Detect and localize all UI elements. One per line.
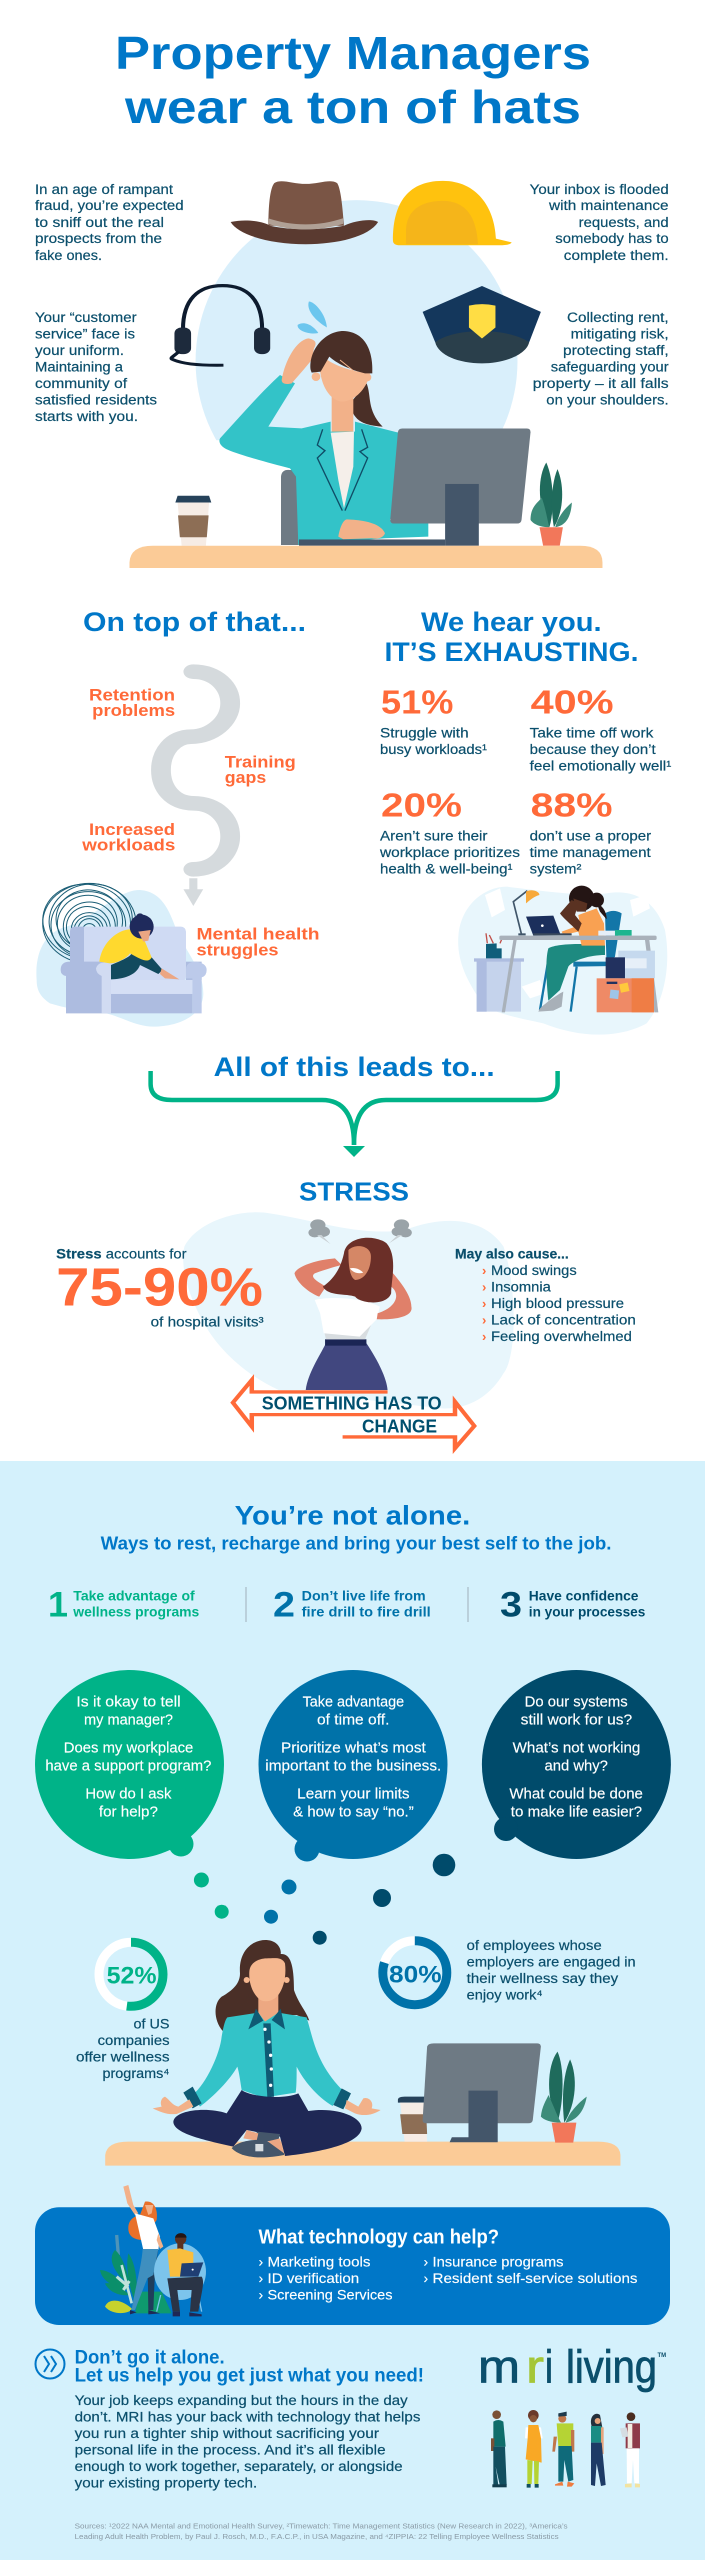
step 1: Take advantage of [73,1589,195,1604]
stat: 51 percent: 51% [381,683,453,720]
panel: what technology can help: › [258,2270,264,2286]
illustration: overworked woman at desk [458,886,667,1035]
monitor [299,428,531,546]
double arrow banner: CHANGE [362,1416,437,1436]
stat: 75-90 percent of hospital visits: of hospital visits³ [151,1315,264,1330]
icon: potted plant [531,462,572,546]
heading: you're not alone [101,1500,611,1553]
text: closing paragraph: Your job keeps expanding but the hours in the day [75,2393,408,2408]
sources [75,2522,568,2541]
figure: man in lime shirt [552,2412,574,2487]
double arrow banner [233,1380,474,1448]
stat: 75-90 percent of hospital visits: 75-90% [56,1258,263,1318]
logo: mri living: i [545,2341,553,2393]
heading: all of this leads to: All of this leads to... [214,1052,495,1082]
step 2: fire drill to fire drill [302,1604,431,1619]
text: customer service note: Maintaining a [35,360,124,374]
heading: stress: STRESS [299,1177,409,1207]
text: fraud hat note: In an age of rampant [35,182,173,197]
text: customer service note: service” face is [35,326,135,342]
logo: mri living: living [566,2341,657,2393]
list: may also cause: › [482,1296,486,1311]
illustration: stressed woman [183,1212,514,1408]
text: security note: safeguarding your [551,360,669,374]
icon: headset [171,286,270,365]
stat: 20 percent: workplace prioritizes [379,845,520,860]
panel: you're not alone background [0,1461,705,2560]
icon: yellow hard hat [393,181,512,245]
text: 80 percent caption: enjoy work⁴ [467,1988,543,2003]
text: 80 percent caption: employers are engaged in [467,1954,636,1969]
heading: we hear you: We hear you. [421,607,602,637]
heading: don't go it alone [75,2346,424,2387]
icon: double chevron circle [36,2350,64,2378]
panel: what technology can help: What technology can help? [258,2226,499,2248]
figure: man in green [491,2410,507,2487]
title: wear a ton of hats [124,81,581,133]
label: increased workloads [81,820,175,854]
bubble: dark teal questions: to make life easier? [511,1805,642,1821]
list: may also cause [455,1246,636,1344]
stat: 40 percent: Take time off work [530,725,654,740]
stat: 51 percent [380,683,488,757]
step 2 [273,1586,431,1625]
bubble: blue advice: & how to say “no.” [293,1805,414,1821]
monitor, cup, plant and desk [129,428,602,568]
label: mental health struggles: struggles [196,940,278,959]
text: maintenance note: with maintenance [548,198,669,213]
step 2: Don’t live life from [302,1589,426,1604]
stat: 75-90 percent of hospital visits: Stress accounts for [56,1246,187,1261]
stat: 88 percent: 88% [531,787,613,824]
bubble: dark teal questions: and why? [544,1759,608,1775]
list: may also cause: › [482,1263,486,1278]
label: retention problems: Retention [89,686,175,705]
title: Property Managers [115,27,591,79]
panel: what technology can help: › [424,2253,428,2269]
panel: what technology can help [35,2185,670,2325]
label: mental health struggles: Mental health [196,925,320,944]
text: security note: protecting staff, [563,343,669,358]
step 3: in your processes [529,1604,645,1619]
step 1: wellness programs [72,1604,199,1619]
heading: you're not alone: You’re not alone. [235,1500,470,1530]
stat: 88 percent: time management [530,845,651,860]
stat: 20 percent: 20% [381,787,462,824]
bubble: green questions: Does my workplace [64,1741,193,1757]
step 3 [500,1586,645,1625]
heading: we hear you: IT’S EXHAUSTING. [384,637,638,667]
step 2: 2 [273,1586,295,1625]
text: closing paragraph: your existing property tech. [75,2476,257,2491]
bubble: green questions: my manager? [84,1713,173,1729]
panel: what technology can help: › [258,2286,264,2302]
logo: mri living: m [478,2341,520,2393]
text: security note [533,310,669,408]
stat: 20 percent [379,787,520,876]
stat: 40 percent: because they don’t [530,742,656,757]
stat: 40 percent [530,683,672,773]
text: 52 percent caption [76,2016,170,2081]
panel: what technology can help: › [258,2253,264,2269]
step 3: 3 [500,1586,522,1625]
panel: what technology can help: Resident self-service solutions [432,2270,638,2286]
text: security note: mitigating risk, [571,326,669,342]
stat: 88 percent: don’t use a proper [530,828,652,843]
label: training gaps [225,752,296,787]
stat: 20 percent: Aren’t sure their [380,828,488,843]
bubble: blue advice: Prioritize what’s most [281,1741,426,1757]
bubble: green questions: Is it okay to tell [76,1695,181,1711]
bubble: green questions: have a support program? [45,1759,211,1775]
stat: 75-90 percent of hospital visits [56,1246,264,1330]
text: fraud hat note: fraud, you’re expected [35,198,184,213]
bubble: blue advice: Learn your limits [297,1787,410,1803]
text: 52 percent caption: offer wellness [76,2049,170,2064]
panel: what technology can help: › [424,2270,428,2286]
step 1 [48,1586,199,1625]
donut: 80 percent: 80% [389,1961,442,1988]
hero illustration: hats and backdrop [170,180,541,440]
text: customer service note: your uniform. [35,343,124,358]
panel: what technology can help: Screening Services [268,2286,392,2302]
label: mental health struggles [196,925,320,959]
figure: meditating woman [153,1940,381,2157]
text: maintenance note: requests, and [579,215,669,230]
desk [129,546,602,568]
list: may also cause: High blood pressure [491,1296,624,1311]
illustration: person on couch [36,879,207,1027]
icon: brown fedora [231,181,378,244]
panel: what technology can help: Insurance programs [432,2253,564,2269]
list: may also cause: Feeling overwhelmed [491,1329,632,1344]
stat: 51 percent: Struggle with [380,725,469,740]
text: maintenance note: complete them. [564,248,669,263]
text: customer service note: starts with you. [35,409,138,424]
bubble: blue advice: Take advantage [303,1695,404,1711]
heading: we hear you [384,607,638,667]
list: may also cause: › [482,1279,486,1294]
text: maintenance note: somebody has to [555,231,669,246]
bubble: green questions: How do I ask [85,1787,172,1803]
bubble: dark teal questions: still work for us? [521,1713,632,1729]
bubble: dark teal questions: Do our systems [525,1695,628,1711]
step 3: Have confidence [529,1589,639,1604]
list: may also cause: › [482,1312,486,1327]
text: closing paragraph: you run a tighter ship without sacrificing your [75,2426,380,2441]
text: 52 percent caption: of US [134,2016,170,2031]
label: increased workloads: Increased [89,820,175,839]
text: customer service note [35,310,157,424]
text: security note: property – it all falls [533,376,669,391]
text: fraud hat note: fake ones. [35,248,102,263]
figure: woman in apron [525,2410,543,2488]
stat: 51 percent: busy workloads¹ [380,742,488,757]
panel: what technology can help: ID verification [268,2270,359,2286]
text: fraud hat note: prospects from the [35,231,162,246]
text: closing paragraph [75,2393,421,2491]
logo: mri living: TM [658,2353,666,2359]
list: may also cause: Insomnia [491,1279,551,1294]
heading: you're not alone: Ways to rest, recharge and bring your best self to the job. [101,1533,611,1553]
bubble: dark teal questions [313,1670,671,1945]
heading: on top of that: On top of that... [83,607,306,637]
bubble: green questions [35,1670,229,1919]
text: maintenance note: Your inbox is flooded [530,182,669,197]
icon: police cap [423,286,541,363]
bubble: blue advice: important to the business. [265,1759,441,1775]
heading: don't go it alone: Don’t go it alone. [75,2346,225,2368]
text: fraud hat note: to sniff out the real [35,215,164,230]
text: security note: on your shoulders. [546,392,669,408]
donut: 52 percent: 52% [107,1962,157,1989]
squiggle arrow [161,672,230,906]
list: may also cause: Lack of concentration [491,1312,636,1327]
logo: mri living [478,2341,666,2393]
sources: Leading Adult Health Problem, by Paul J. Rosch, M.D., F.A.C.P., in USA Magazine, and ⁴ZIPPIA: 22 Telling Employee Wellness Statistics [75,2532,559,2541]
text: maintenance note [530,182,669,263]
label: increased workloads: workloads [81,835,175,854]
text: 80 percent caption: of employees whose [467,1938,602,1953]
stat: 40 percent: feel emotionally well¹ [530,758,672,773]
text: customer service note: satisfied residents [35,392,157,408]
label: training gaps: Training [225,752,296,771]
step 1: 1 [48,1586,68,1625]
icon: coffee cup [175,496,211,546]
desk with cup, monitor and plant [105,2043,620,2166]
text: customer service note: community of [35,376,127,391]
donut: 80 percent [383,1941,447,2005]
text: customer service note: Your “customer [35,310,137,325]
icon: sweat drops [298,302,327,333]
figure: stressed manager [219,331,428,545]
sources: Sources: ¹2022 NAA Mental and Emotional Health Survey, ²Timewatch: Time Management Statistics (New Research in 2022), ³America’s [75,2522,568,2531]
text: security note: Collecting rent, [567,310,669,325]
figure: woman in teal top [591,2414,606,2486]
text: 80 percent caption [467,1938,636,2003]
text: closing paragraph: personal life in the process. And it’s all flexible [75,2442,386,2457]
stat: 88 percent: system² [530,861,582,876]
text: 52 percent caption: companies [98,2033,170,2048]
heading: don't go it alone: Let us help you get just what you need! [75,2365,424,2387]
bubble: blue advice: of time off. [317,1713,389,1729]
text: 52 percent caption: programs⁴ [102,2066,170,2081]
bubble: green questions: for help? [99,1805,158,1821]
donut: 52 percent [99,1942,163,2006]
illustration: five residents [491,2410,640,2488]
list: may also cause: Mood swings [491,1263,577,1278]
label: training gaps: gaps [225,768,266,787]
text: 80 percent caption: their wellness say they [467,1971,618,1986]
text: closing paragraph: enough to work together, separately, or alongside [75,2459,403,2474]
list: may also cause: May also cause... [455,1246,569,1261]
illustration: two people with plants [100,2185,206,2316]
bubble: dark teal questions: What could be done [509,1787,643,1803]
logo: mri living: r [526,2341,544,2393]
title [115,27,591,133]
panel: what technology can help: Marketing tools [268,2253,370,2269]
text: fraud hat note [35,182,184,263]
label: retention problems [89,686,175,720]
label: retention problems: problems [92,701,175,720]
bubble: blue advice [258,1670,448,1924]
text: closing paragraph: don’t. MRI has your back with technology that helps [75,2409,421,2424]
stat: 40 percent: 40% [531,683,614,720]
figure: man with maroon cardigan [620,2412,640,2487]
stat: 20 percent: health & well-being¹ [380,861,513,876]
bubble: dark teal questions: What’s not working [513,1741,640,1757]
stat: 88 percent [530,787,652,876]
double arrow banner: SOMETHING HAS TO [262,1394,442,1414]
bracket arrow [151,1071,558,1157]
list: may also cause: › [482,1329,486,1344]
